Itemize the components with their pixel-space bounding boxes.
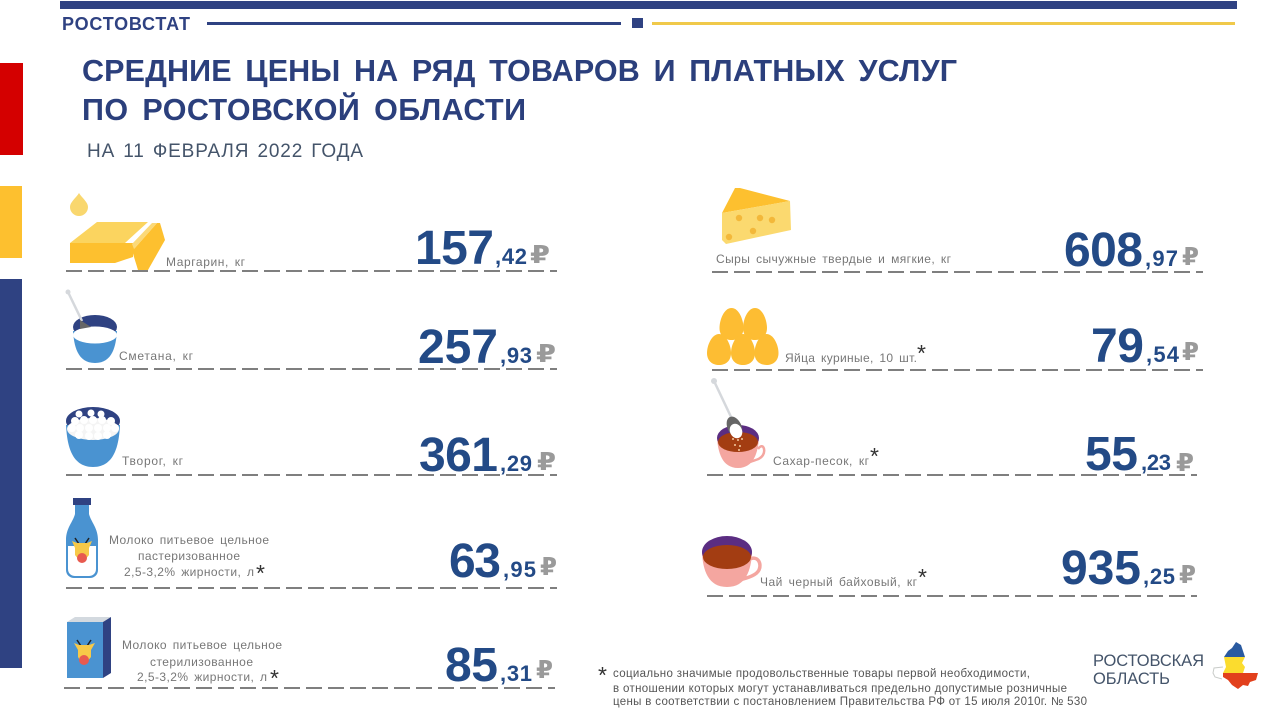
- price: ,42: [495, 244, 527, 269]
- icon: Rostov region map: [1213, 642, 1258, 689]
- icon: milk carton: [67, 617, 111, 678]
- title: [82, 54, 957, 127]
- label: *: [256, 560, 265, 586]
- icon: tea cup: [702, 536, 760, 587]
- price: ,29: [500, 451, 532, 476]
- label: Сметана, кг: [119, 349, 194, 363]
- header band: [60, 1, 1237, 34]
- row: margarine: [66, 193, 557, 275]
- price: ₽: [537, 448, 556, 476]
- label: *: [918, 564, 927, 590]
- row: cottage cheese: [66, 407, 557, 482]
- icon: sour cream cup: [66, 290, 117, 363]
- price: ₽: [1182, 338, 1199, 366]
- price: 79: [1091, 320, 1144, 373]
- icon: milk bottle: [66, 498, 98, 578]
- label: 2,5-3,2% жирности, л: [124, 565, 254, 579]
- price: ,31: [500, 661, 532, 686]
- price: [1061, 542, 1196, 595]
- side flag stripes: [0, 63, 23, 668]
- icon: cottage cheese cup: [66, 407, 120, 467]
- price: ₽: [1176, 449, 1194, 477]
- price: [418, 321, 556, 374]
- label: *: [917, 340, 926, 366]
- price: 85: [445, 639, 498, 692]
- label: *: [270, 665, 279, 691]
- price: ,25: [1143, 564, 1175, 589]
- price: ,97: [1145, 246, 1178, 271]
- label: пастеризованное: [138, 549, 240, 563]
- price: ,23: [1141, 450, 1171, 475]
- footnote: в отношении которых могут устанавливаться предельно допустимые розничные: [613, 683, 1067, 695]
- footnote: [598, 662, 1087, 708]
- price: [1085, 428, 1194, 481]
- label: *: [870, 443, 879, 469]
- price: [449, 535, 557, 588]
- region name: ОБЛАСТЬ: [1093, 670, 1170, 688]
- label: Яйца куриные, 10 шт.: [785, 351, 917, 365]
- price: ,95: [503, 557, 536, 582]
- price: ₽: [1179, 561, 1196, 589]
- row: sour cream: [66, 290, 557, 374]
- icon: butter: [70, 193, 165, 270]
- title: СРЕДНИЕ ЦЕНЫ НА РЯД ТОВАРОВ И ПЛАТНЫХ УСЛУГ: [82, 54, 957, 88]
- price: 257: [418, 321, 498, 374]
- footnote: социально значимые продовольственные товары первой необходимости,: [613, 668, 1030, 680]
- price: ,93: [500, 343, 532, 368]
- label: [785, 340, 926, 366]
- footnote: цены в соответствии с постановлением Правительства РФ от 15 июля 2010г. № 530: [613, 696, 1087, 708]
- price: ,54: [1146, 342, 1180, 367]
- icon: eggs: [707, 308, 778, 365]
- price: ₽: [536, 656, 553, 684]
- label: Сахар-песок, кг: [773, 454, 870, 468]
- price: ₽: [540, 553, 557, 581]
- label: стерилизованное: [150, 655, 253, 669]
- price: ₽: [530, 241, 550, 269]
- label: 2,5-3,2% жирности, л: [137, 670, 267, 684]
- label: Маргарин, кг: [166, 255, 246, 269]
- label: Чай черный байховый, кг: [760, 575, 918, 589]
- region name: РОСТОВСКАЯ: [1093, 652, 1204, 670]
- price: 157: [415, 222, 494, 275]
- price: 55: [1085, 428, 1138, 481]
- label: [773, 443, 879, 469]
- row: cheese: [712, 188, 1203, 277]
- label: [122, 638, 282, 691]
- region name: [1093, 652, 1204, 688]
- row: sugar: [707, 378, 1197, 481]
- label: Молоко питьевое цельное: [122, 638, 282, 652]
- icon: cheese wedge: [722, 188, 791, 244]
- row: tea: [702, 536, 1197, 596]
- row: sterilized milk: [64, 617, 555, 692]
- label: [109, 533, 269, 586]
- label: [760, 564, 927, 590]
- price: 361: [419, 429, 498, 482]
- label: Сыры сычужные твердые и мягкие, кг: [716, 252, 952, 266]
- price: 608: [1064, 224, 1143, 277]
- price: [445, 639, 553, 692]
- label: Молоко питьевое цельное: [109, 533, 269, 547]
- subtitle date: НА 11 ФЕВРАЛЯ 2022 ГОДА: [87, 141, 363, 162]
- row: eggs: [707, 308, 1203, 373]
- icon: cup with sugar: [711, 378, 764, 468]
- label: Творог, кг: [122, 454, 184, 468]
- price: [415, 222, 550, 275]
- price: ₽: [536, 340, 556, 368]
- organisation name: РОСТОВСТАТ: [62, 14, 190, 34]
- price: ₽: [1182, 243, 1199, 271]
- price: [419, 429, 556, 482]
- price: [1091, 320, 1199, 373]
- title: ПО РОСТОВСКОЙ ОБЛАСТИ: [82, 91, 526, 127]
- footnote: *: [598, 662, 607, 688]
- price: [1064, 224, 1199, 277]
- price: 63: [449, 535, 501, 588]
- row: pasteurized milk: [66, 498, 557, 588]
- price: 935: [1061, 542, 1141, 595]
